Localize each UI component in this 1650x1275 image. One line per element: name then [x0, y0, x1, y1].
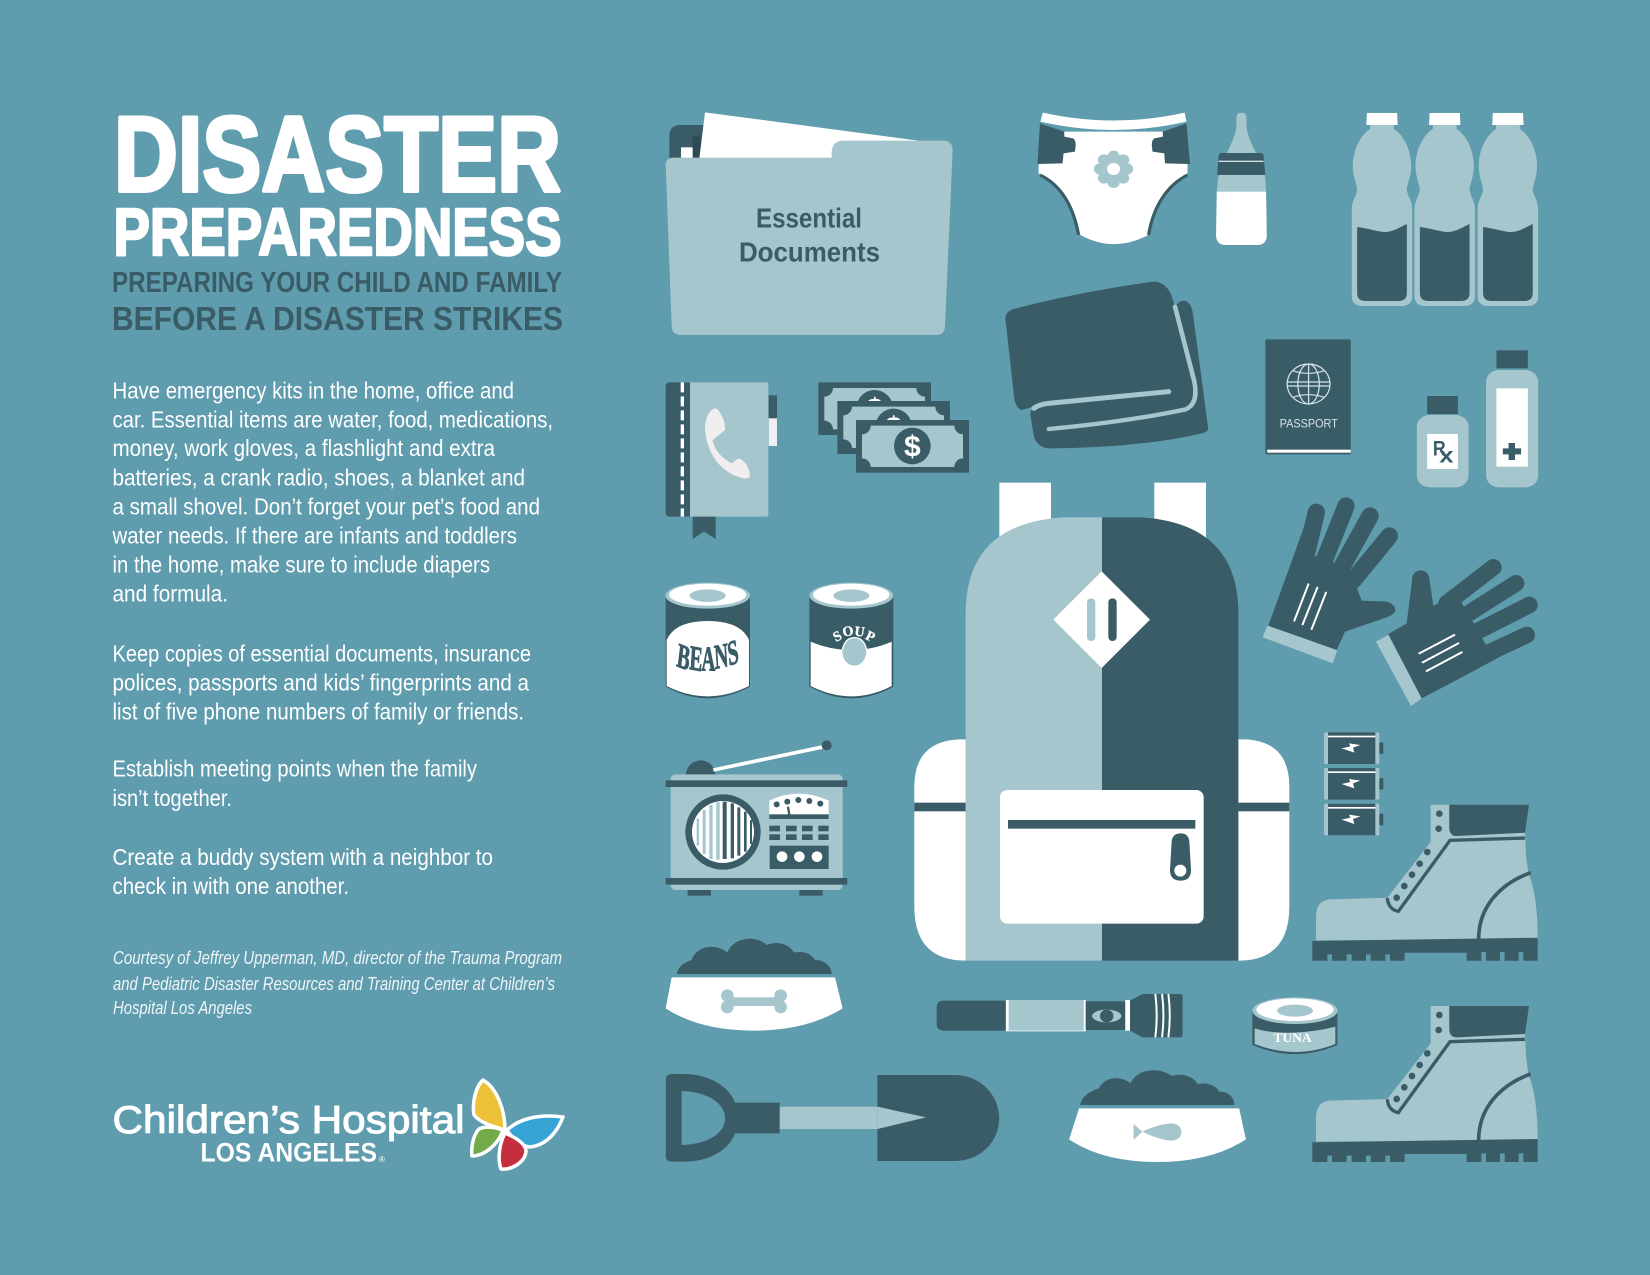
icon: phone book: [666, 382, 777, 539]
soup label: SOUP: [831, 624, 877, 646]
text block: meeting points: isn’t together.: [112, 785, 232, 811]
bill back: $: [866, 393, 883, 426]
text block: buddy system: check in with one another.: [112, 873, 349, 899]
icon: passport: [1265, 339, 1351, 454]
registered mark: ®: [379, 1155, 385, 1164]
folder label: Documents: [739, 237, 880, 268]
icon: prescription bottle: [1417, 396, 1469, 487]
subtitle line two: BEFORE A DISASTER STRIKES: [112, 300, 563, 337]
icon: crank radio: [666, 740, 847, 896]
text block: buddy system: Create a buddy system with a neighbor to: [112, 844, 493, 870]
battery two: [1324, 768, 1383, 800]
cat kibble: [1080, 1070, 1234, 1105]
icon: cat food bowl: [1069, 1070, 1246, 1162]
radio buttons: [769, 826, 829, 840]
bill middle: [837, 401, 950, 454]
text block: emergency kits: car. Essential items are water, food, medications,: [112, 406, 553, 432]
text block: courtesy credit: and Pediatric Disaster Resources and Training Center at Children’s: [113, 974, 555, 994]
text block: copies of documents: [112, 641, 531, 724]
text block: courtesy credit: Hospital Los Angeles: [113, 998, 252, 1018]
tuna label: TUNA: [1273, 1031, 1313, 1045]
bill back: [818, 382, 931, 435]
icon: dog food bowl: [666, 939, 843, 1031]
icon: tuna can: [1252, 997, 1338, 1054]
radio speaker: [685, 794, 761, 870]
rx label: x: [1439, 443, 1454, 467]
icon: flashlight: [937, 994, 1183, 1037]
backpack side pockets: [914, 739, 1289, 961]
text block: copies of documents: polices, passports and kids’ fingerprints and a: [112, 670, 530, 696]
fish: [1134, 1123, 1181, 1141]
water bottle three: [1478, 113, 1538, 306]
battery one: [1324, 732, 1383, 764]
radio dial: [769, 794, 829, 819]
title: [112, 94, 563, 337]
heading: preparedness: PREPAREDNESS: [114, 195, 562, 270]
icon: beans can: [665, 583, 750, 698]
text block: emergency kits: [112, 377, 553, 607]
text block: emergency kits: and formula.: [112, 581, 228, 607]
text block: emergency kits: Have emergency kits in the home, office and: [112, 377, 514, 403]
icon: diaper: [1037, 113, 1190, 244]
text block: emergency kits: money, work gloves, a flashlight and extra: [112, 435, 496, 461]
folder label: Essential: [756, 203, 862, 234]
icon: boot lower: [1312, 1006, 1538, 1162]
icon: boot upper: [1312, 805, 1538, 961]
kibble: [677, 939, 832, 974]
icon: money bills: [818, 382, 969, 473]
text block: meeting points: Establish meeting points when the family: [112, 756, 477, 782]
battery three: [1324, 804, 1383, 835]
passport label: PASSPORT: [1280, 417, 1338, 431]
right glove: [1376, 567, 1529, 706]
left glove: [1263, 506, 1395, 663]
folder label: [739, 203, 880, 268]
icon: batteries: [1324, 732, 1383, 835]
beans label: BEANS: [675, 633, 741, 680]
text block: emergency kits: batteries, a crank radio, shoes, a blanket and: [112, 465, 525, 491]
radio knob panel: [770, 846, 829, 869]
bill front: [856, 420, 969, 473]
backpack straps: [999, 483, 1206, 556]
bill front: $: [904, 431, 921, 464]
text block: meeting points: [112, 756, 477, 811]
radio antenna: [686, 740, 832, 775]
text block: copies of documents: Keep copies of essential documents, insurance: [112, 641, 531, 667]
rx label: R: [1433, 436, 1446, 460]
icon: backpack: [914, 483, 1289, 961]
subtitle line one: PREPARING YOUR CHILD AND FAMILY: [112, 267, 562, 299]
text block: emergency kits: water needs. If there are infants and toddlers: [112, 522, 517, 548]
text block: buddy system: [112, 844, 493, 899]
bill middle: $: [885, 412, 902, 445]
backpack front pocket: [1000, 790, 1204, 924]
heading: disaster: DISASTER: [114, 94, 561, 214]
backpack diamond patch: [1053, 571, 1150, 668]
icon: soup can: [809, 583, 893, 698]
icon: medicine bottle with cross: [1486, 350, 1538, 487]
text block: copies of documents: list of five phone numbers of family or friends.: [112, 698, 524, 724]
bone: [721, 989, 787, 1013]
logo butterfly: [472, 1080, 563, 1169]
logo wordmark: Children’s Hospital: [112, 1099, 464, 1142]
logo subline: LOS ANGELES: [200, 1138, 377, 1168]
text block: emergency kits: in the home, make sure to include diapers: [112, 552, 490, 578]
backpack body: [966, 517, 1238, 961]
icon: work gloves: [1263, 506, 1529, 706]
rx label: [1433, 436, 1454, 467]
text block: emergency kits: a small shovel. Don’t forget your pet’s food and: [112, 493, 540, 519]
text block: courtesy credit: Courtesy of Jeffrey Upperman, MD, director of the Trauma Program: [113, 948, 562, 968]
logo: children's hospital los angeles: [112, 1080, 563, 1169]
icon: shovel: [666, 1074, 999, 1162]
icon: water bottles: [1352, 113, 1538, 306]
water bottle two: [1414, 113, 1475, 306]
icon: essential documents folder: [666, 112, 953, 335]
passport globe: [1287, 364, 1330, 404]
icon: folded blanket: [1005, 282, 1208, 448]
icon: baby bottle: [1216, 113, 1267, 245]
text block: courtesy credit: [113, 948, 562, 1018]
water bottle one: [1352, 113, 1412, 306]
